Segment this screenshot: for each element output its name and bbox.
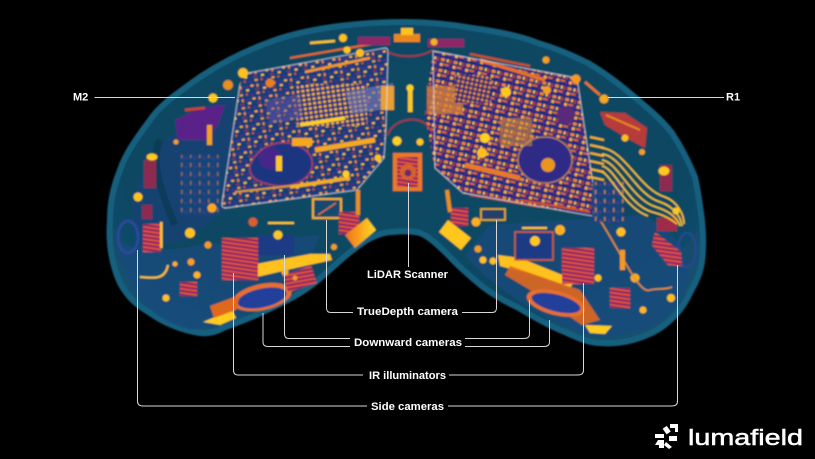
left lower components	[140, 228, 212, 302]
right downward camera and IR illuminators	[474, 225, 612, 334]
Lumafield logo	[655, 424, 803, 450]
TrueDepth left leader	[326, 220, 353, 312]
center screw	[406, 84, 414, 112]
R1 leader	[608, 96, 724, 98]
IR left leader	[234, 273, 363, 375]
label: Side cameras: Side cameras	[371, 401, 444, 413]
right lower components	[594, 220, 675, 314]
label: IR illuminators: IR illuminators	[369, 370, 446, 382]
yellow blocks by nose bridge	[345, 218, 471, 250]
headset body outline	[109, 22, 703, 343]
Side left leader	[138, 250, 367, 406]
LiDAR Scanner leader	[408, 183, 410, 267]
left downward camera and IR illuminators	[203, 218, 337, 325]
TrueDepth camera: left	[313, 190, 359, 234]
Downward inner right leader	[465, 300, 530, 338]
top-right module near R1	[542, 56, 647, 222]
inner blue tissue	[118, 95, 696, 335]
M2 leader	[94, 96, 235, 98]
top-left module near M2	[174, 34, 402, 215]
top-center connector	[310, 28, 464, 56]
LiDAR scanner module	[388, 120, 432, 191]
device CT scan	[109, 22, 703, 343]
label: LiDAR Scanner: LiDAR Scanner	[367, 269, 449, 281]
ribbon cable	[602, 148, 684, 226]
TrueDepth camera: right	[447, 190, 505, 226]
left logic board: M2	[222, 43, 394, 208]
Downward outer left leader	[263, 313, 350, 346]
logo wordmark: lumafield	[688, 425, 803, 450]
Downward outer right leader	[465, 320, 550, 346]
board outlines	[222, 48, 598, 217]
label: R1: R1	[726, 92, 740, 104]
leader lines	[94, 98, 724, 406]
label: Downward cameras: Downward cameras	[354, 337, 462, 349]
Side right leader	[448, 265, 678, 406]
label: M2: M2	[73, 92, 88, 104]
IR right leader	[449, 283, 584, 375]
TrueDepth right leader	[462, 220, 496, 312]
Downward inner left leader	[284, 255, 350, 338]
left side camera	[134, 154, 162, 252]
label: TrueDepth camera: TrueDepth camera	[357, 306, 459, 318]
right logic board: R1	[425, 51, 598, 217]
logo mark	[655, 424, 678, 449]
right side camera	[652, 165, 682, 266]
